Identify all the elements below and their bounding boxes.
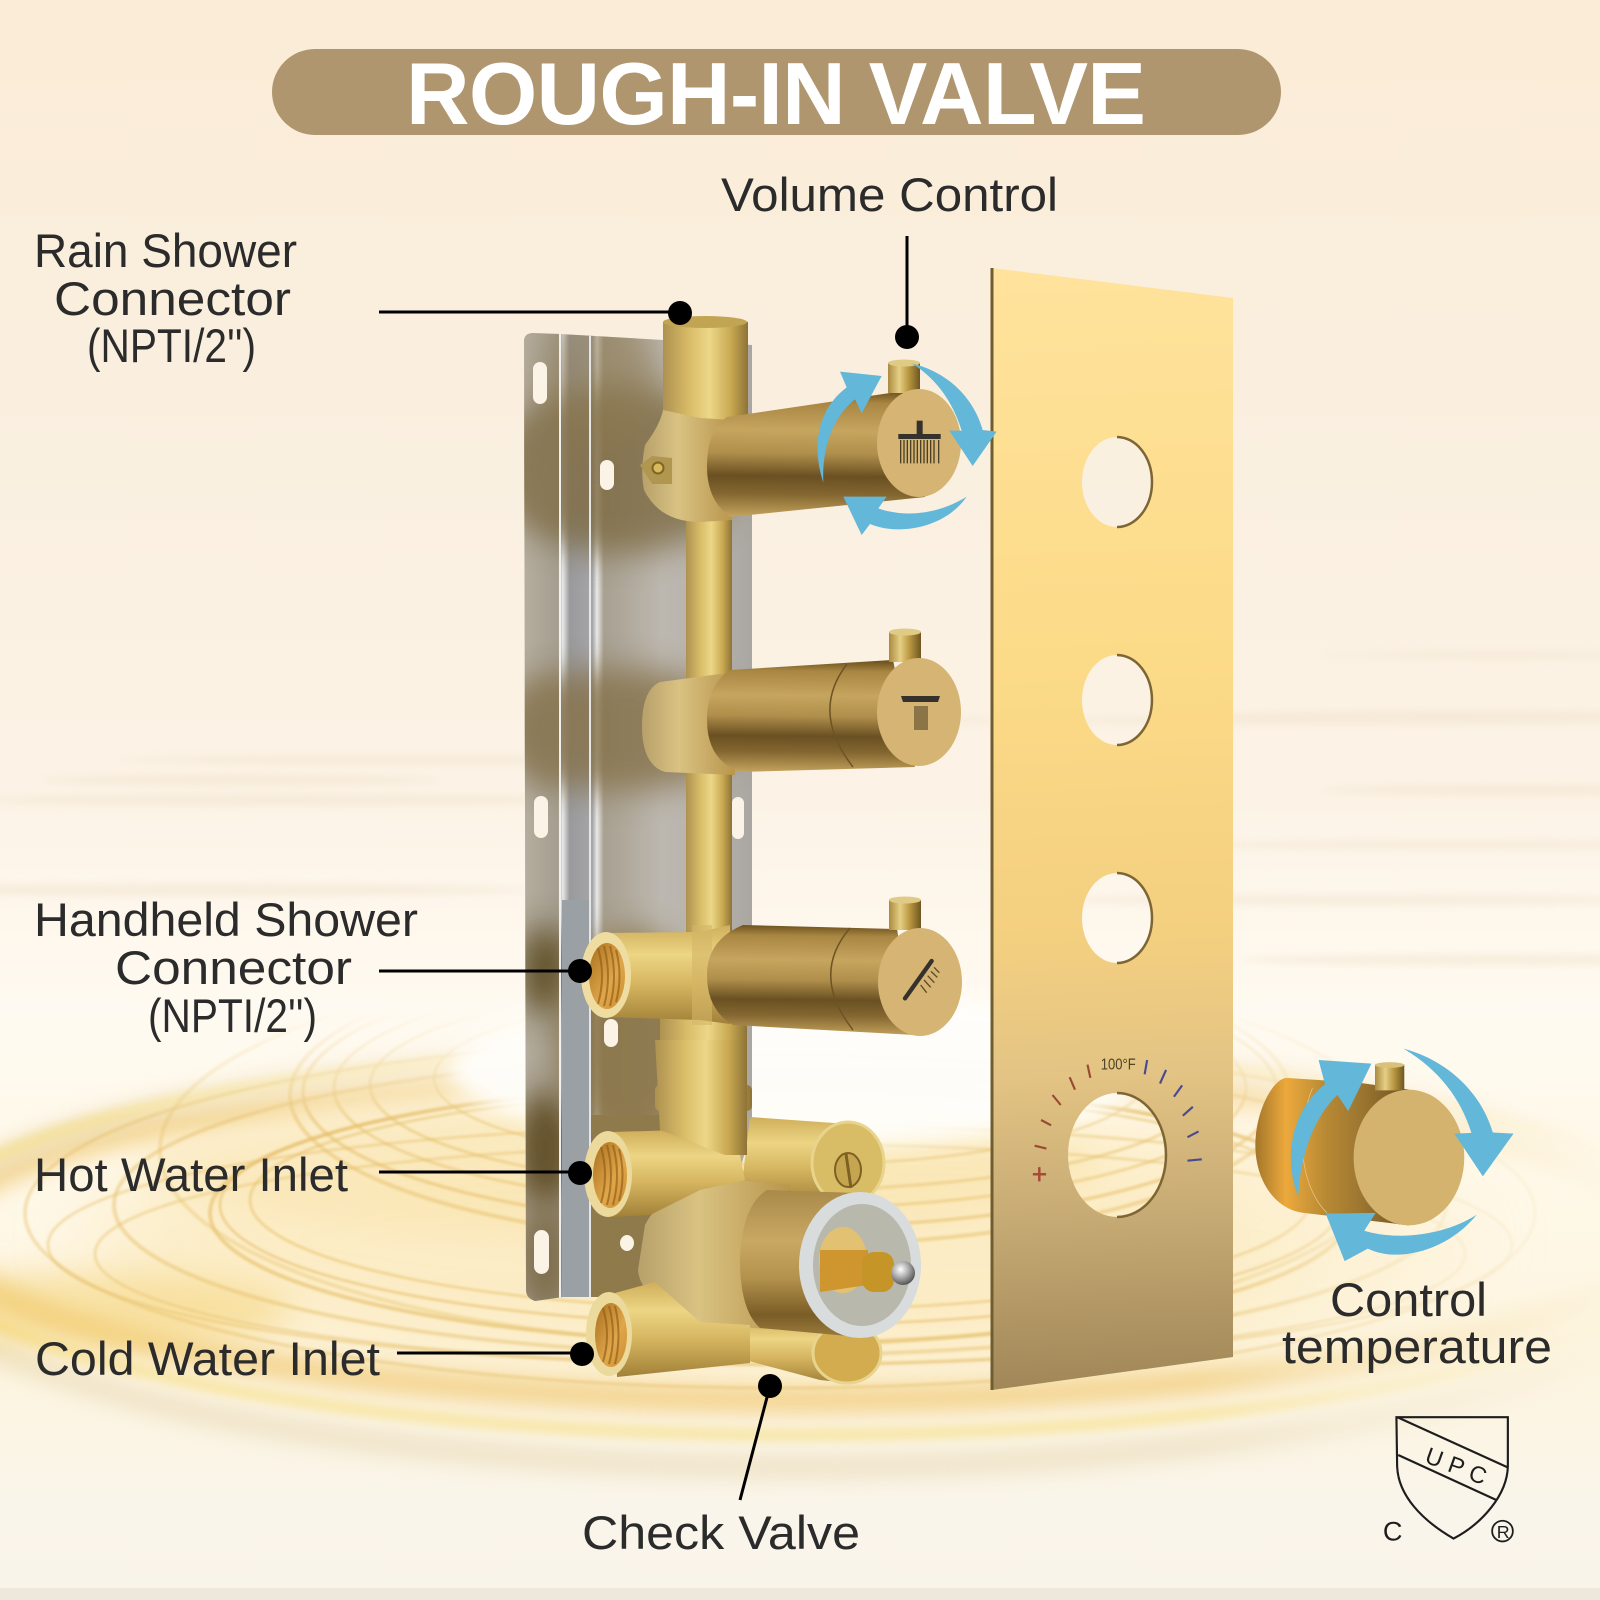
rain shower text: Rain Shower: [34, 224, 297, 277]
check valve text: Check Valve: [582, 1506, 860, 1559]
leader line with dot: [379, 959, 592, 983]
stop pin: [888, 360, 920, 393]
plate edge: [990, 268, 994, 1390]
label: control temperature: temperature: [1282, 1320, 1552, 1373]
cold ticks: [1145, 1060, 1202, 1161]
registered mark: R: [1497, 1522, 1510, 1542]
handheld shower text: Connector: [115, 941, 352, 994]
upper check cylinder: [740, 1117, 848, 1204]
icon: rain shower head: [898, 421, 941, 463]
hot water inlet tube: [612, 1130, 745, 1217]
concentric ripple rings: [22, 1022, 1536, 1390]
cartridge stem: [819, 1227, 915, 1293]
icon: handheld head: [905, 961, 939, 998]
knob face: [1354, 1090, 1464, 1225]
panel: gold trim plate: [992, 268, 1233, 1390]
leader line with dot: [895, 236, 919, 349]
main casting: [638, 1180, 790, 1330]
cold water inlet tube: [615, 1282, 750, 1377]
certification mark: UPC shield: [1383, 1417, 1513, 1546]
handheld shower text: (NPTI/2''): [148, 989, 317, 1042]
handheld outlet fitting: [581, 925, 730, 1025]
handle: rain shower diverter: [707, 360, 961, 517]
leader line with dot: [379, 301, 692, 325]
background: cream water surface: [0, 820, 1600, 1600]
rain shower text: [34, 224, 297, 372]
mixing body: [584, 1040, 921, 1383]
rain shower text: Connector: [54, 272, 291, 325]
golden ripple glow: [90, 1110, 1490, 1370]
cold water text: Cold Water Inlet: [35, 1332, 380, 1385]
label: cold water inlet: [35, 1332, 594, 1385]
knob pin: [1375, 1062, 1404, 1090]
knob barrel: [1255, 1078, 1409, 1225]
certification C: C: [1383, 1515, 1402, 1546]
label: check valve: [582, 1374, 860, 1559]
plastic sleeve ring: [799, 1192, 921, 1338]
hot water text: Hot Water Inlet: [34, 1148, 348, 1201]
rain shower text: (NPTI/2''): [87, 319, 256, 372]
shield outline: [1396, 1417, 1508, 1539]
plate with four openings: [992, 268, 1233, 1390]
label: volume control: [721, 168, 1058, 349]
handheld shower text: [34, 893, 418, 1042]
label: rain shower connector: [34, 224, 692, 372]
label: control temperature: [1282, 1273, 1552, 1373]
leader line with dot: [379, 1161, 592, 1185]
label: hot water inlet: [34, 1148, 592, 1201]
end cap: [877, 389, 961, 497]
barrel: [707, 390, 925, 517]
leader line with dot: [740, 1374, 782, 1500]
bracket slots: [533, 362, 744, 1274]
hot ticks: [1033, 1065, 1090, 1181]
temperature scale: [1033, 1056, 1202, 1181]
vertical riser pipes: [655, 316, 752, 1150]
label: control temperature: Control: [1330, 1273, 1487, 1326]
opening rims: [1117, 437, 1166, 1217]
shield letters: P: [1445, 1451, 1468, 1481]
rotation arrows on top handle: [818, 363, 997, 535]
temperature control knob: [1255, 1049, 1514, 1261]
leader line with dot: [397, 1342, 594, 1366]
label: handheld shower connector: [34, 893, 592, 1042]
title banner: [272, 44, 1281, 143]
icon: fixed shower: [901, 696, 940, 730]
100 degree label: 100°F: [1101, 1056, 1136, 1073]
banner pill: [272, 49, 1281, 135]
title text: ROUGH-IN VALVE: [406, 44, 1146, 143]
middle body: [642, 672, 735, 775]
valve assembly: [500, 310, 997, 1383]
handheld shower text: Handheld Shower: [34, 893, 418, 946]
handle: handheld shower: [707, 896, 962, 1036]
knob arrows: [1291, 1049, 1514, 1261]
golden ripples, faded upward and to the right: [0, 1022, 1579, 1486]
top body with outlet fitting: [640, 410, 732, 522]
lower check cylinder: [745, 1320, 850, 1383]
small screw: [640, 456, 672, 484]
shield letters: U: [1422, 1442, 1447, 1473]
shield letters: [1422, 1442, 1490, 1490]
front cartridge housing: [740, 1190, 858, 1337]
handle: overhead shower: [707, 628, 961, 772]
mounting bracket: [524, 333, 752, 1301]
shield letters: C: [1465, 1460, 1490, 1490]
volume control text: Volume Control: [721, 168, 1058, 221]
